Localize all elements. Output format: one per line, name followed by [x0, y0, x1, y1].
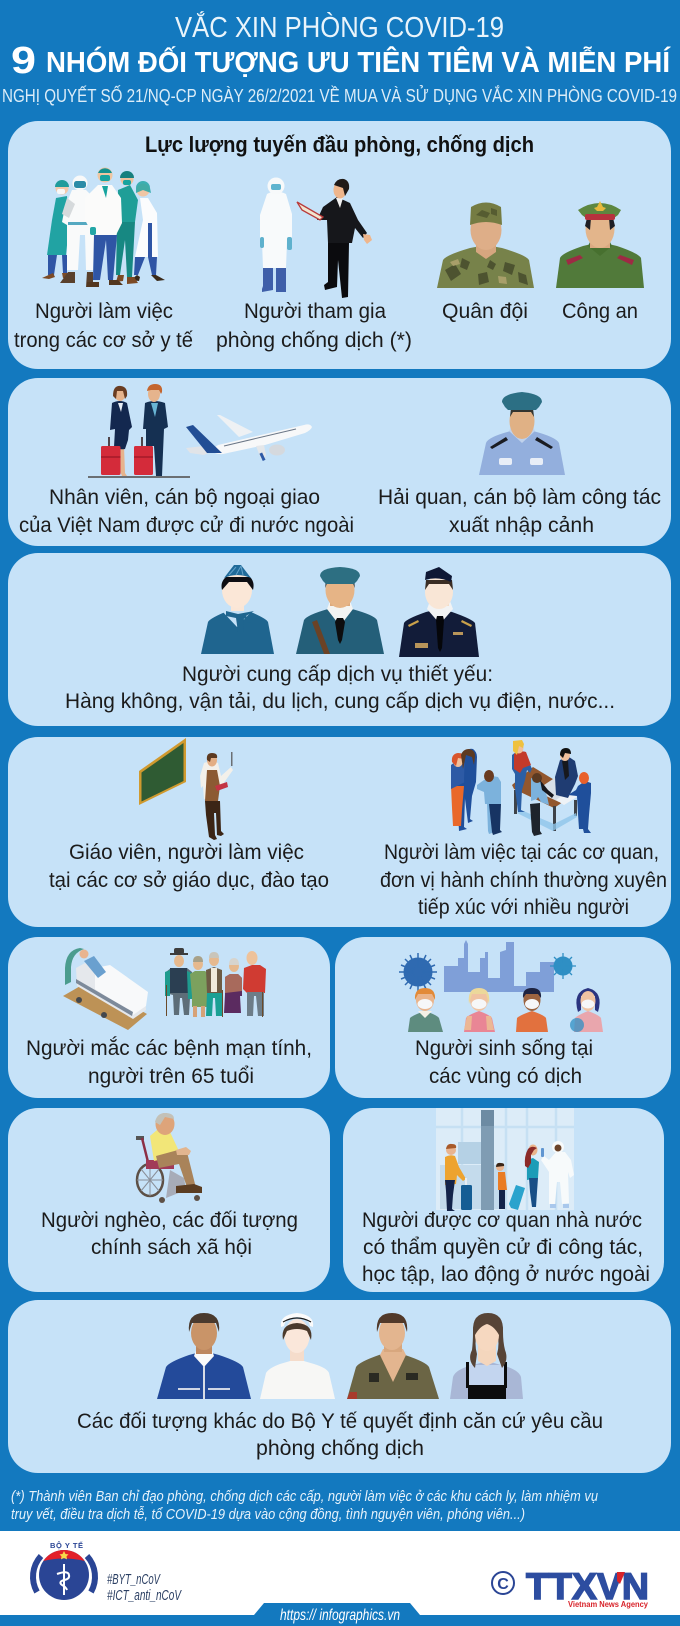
icon: aviation officer	[399, 567, 479, 657]
icon: flight attendant	[201, 565, 274, 654]
panel: chronic illness and elderly	[8, 937, 330, 1098]
label: health workers	[14, 299, 193, 352]
label: anti-epidemic participants: Người tham gia	[244, 299, 386, 323]
label: epidemic areas: các vùng có dịch	[429, 1064, 582, 1088]
icon: protective suit worker	[260, 178, 292, 292]
icon: elderly group	[165, 948, 266, 1017]
website tab: https:// infographics.vn	[280, 1607, 400, 1624]
label: other groups: Các đối tượng khác do Bộ Y tế quyết định căn cứ yêu cầu	[77, 1409, 603, 1433]
icon: worker in blue jacket	[157, 1313, 251, 1399]
panel: people sent abroad	[343, 1108, 664, 1292]
label: health workers: trong các cơ sở y tế	[14, 328, 193, 352]
panel: teachers and public-facing officials	[8, 737, 671, 927]
label: teachers: tại các cơ sở giáo dục, đào tạo	[49, 868, 329, 892]
label: anti-epidemic participants	[216, 299, 412, 352]
label: army: Quân đội	[442, 299, 528, 323]
label: poor people: Người nghèo, các đối tượng	[41, 1208, 298, 1232]
title block	[2, 10, 677, 106]
panel heading: Lực lượng tuyến đầu phòng, chống dịch	[145, 132, 534, 157]
label: administrative workers	[380, 840, 667, 919]
icon: official in black suit with clipboard	[297, 179, 372, 298]
label: essential services: Hàng không, vận tải, du lịch, cung cấp dịch vụ điện, nước...	[65, 689, 615, 713]
label: epidemic areas: Người sinh sống tại	[415, 1036, 593, 1060]
label: essential services: Người cung cấp dịch vụ thiết yếu:	[182, 662, 493, 686]
label: anti-epidemic participants: phòng chống dịch (*)	[216, 328, 412, 352]
title line: vaccine: VẮC XIN PHÒNG COVID-19	[175, 10, 504, 44]
label: chronic disease: Người mắc các bệnh mạn tính,	[26, 1035, 312, 1060]
label: administrative workers: tiếp xúc với nhiều người	[418, 895, 629, 919]
icon: police officer	[556, 201, 644, 288]
icon: man in olive uniform	[347, 1313, 439, 1399]
label: other groups	[77, 1409, 603, 1460]
label: diplomatic staff	[19, 485, 354, 537]
label: sent abroad: có thẩm quyền cử đi công tác,	[363, 1235, 643, 1259]
label: chronic disease: người trên 65 tuổi	[88, 1064, 254, 1088]
label: sent abroad: học tập, lao động ở nước ngoài	[362, 1262, 650, 1286]
label: customs: Hải quan, cán bộ làm công tác	[378, 485, 661, 509]
label: police: Công an	[562, 299, 638, 323]
logo: TTXVN: TTXVN	[526, 1566, 649, 1607]
label: chronic disease	[26, 1035, 312, 1088]
icon: office workers at a table	[451, 740, 591, 836]
title number 9: 9	[11, 40, 36, 82]
label: diplomatic staff: của Việt Nam được cử đi nước ngoài	[19, 513, 354, 537]
icon: chalkboard	[139, 738, 186, 805]
illustration: airport scene	[436, 1108, 574, 1211]
website tab	[0, 1603, 680, 1626]
icon: virus right	[550, 953, 576, 979]
label: poor people: chính sách xã hội	[91, 1235, 252, 1259]
logo: Ministry of Health	[33, 1540, 95, 1600]
icon: man in wheelchair	[136, 1113, 202, 1203]
hashtags: #BYT_nCoV	[107, 1571, 161, 1588]
label: other groups: phòng chống dịch	[256, 1436, 424, 1460]
panel: diplomats and customs	[8, 378, 671, 546]
icon: teacher	[200, 752, 233, 840]
icon: woman with apron	[450, 1313, 523, 1399]
icon: airplane	[186, 415, 312, 461]
label: poor people	[41, 1208, 298, 1259]
icon: masked residents	[408, 988, 603, 1032]
footnote: (*) Thành viên Ban chỉ đạo phòng, chống dịch các cấp, người làm việc ở các khu cách ly, làm nhiệm vụ	[11, 1488, 599, 1505]
label: epidemic areas	[415, 1036, 593, 1088]
panel: poor and social policy beneficiaries	[8, 1108, 330, 1292]
label: teachers: Giáo viên, người làm việc	[69, 840, 304, 864]
label: sent abroad: Người được cơ quan nhà nước	[362, 1208, 642, 1232]
logo: TTXVN: Vietnam News Agency	[568, 1599, 648, 1609]
label: health workers: Người làm việc	[35, 299, 173, 323]
logo lettering: BỘ Y TẾ	[50, 1540, 83, 1550]
label: diplomatic staff: Nhân viên, cán bộ ngoại giao	[49, 485, 320, 509]
footer white band	[0, 1531, 680, 1615]
panel: other groups	[8, 1300, 671, 1473]
icon: customs officer	[479, 392, 565, 475]
label: teachers	[49, 840, 329, 892]
icon: soldier	[437, 202, 534, 288]
label: customs	[378, 485, 661, 537]
panel: frontline forces	[8, 121, 671, 369]
icon: city skyline	[444, 940, 554, 992]
panel: essential service providers	[8, 553, 671, 726]
footnote: truy vết, điều tra dịch tễ, tổ COVID-19 dựa vào cộng đồng, tình nguyện viên, phóng viên...)	[11, 1506, 525, 1523]
hashtags: #ICT_anti_nCoV	[107, 1587, 182, 1604]
icon: virus left	[399, 953, 437, 991]
icon: hospital bed	[63, 948, 148, 1030]
panel: people in epidemic areas	[335, 937, 671, 1098]
logo: TTXVN: C	[497, 1576, 509, 1593]
label: customs: xuất nhập cảnh	[449, 513, 594, 537]
icon: medical staff group	[42, 168, 165, 287]
icon: diplomats with suitcases	[88, 384, 190, 478]
label: administrative workers: Người làm việc tại các cơ quan,	[384, 840, 659, 864]
label: sent abroad	[362, 1208, 650, 1286]
hashtags	[107, 1571, 182, 1604]
footnote	[11, 1488, 599, 1523]
icon: nurse	[260, 1313, 335, 1399]
icon: pilot	[296, 567, 384, 654]
label: essential services	[65, 662, 615, 713]
